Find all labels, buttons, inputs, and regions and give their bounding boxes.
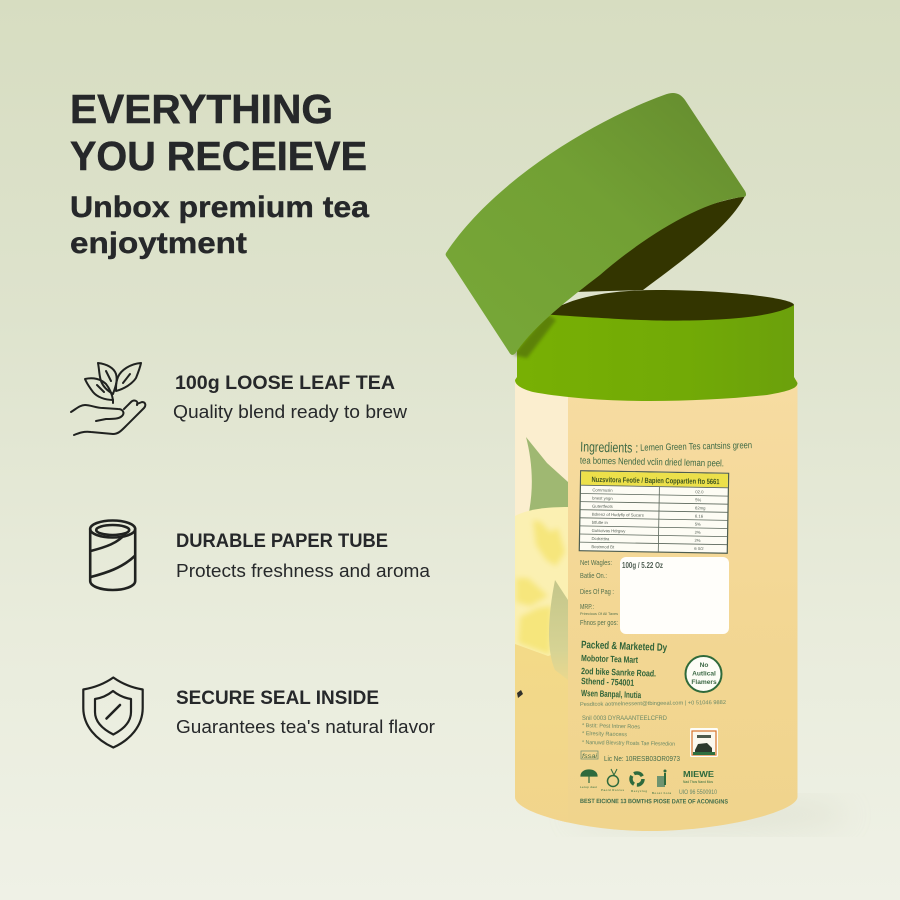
licence line: Lic Ne: 10RESB03OR0973 <box>604 754 680 763</box>
recycling icons: MIEWE <box>683 770 715 779</box>
best before note: BEST EICIONE 13 BOMTHS PIOSE DATE OF ACONIGINS <box>580 798 728 806</box>
badge: no artificial flavors: No <box>700 662 708 669</box>
tube shadow <box>570 797 850 833</box>
nutrition table <box>579 471 729 553</box>
pack details: Batlie On.: <box>580 571 607 580</box>
packed and marketed by: Sthend - 754001 <box>581 676 634 688</box>
recycling icons: Nad Thos Nand Mos <box>683 780 713 784</box>
product: paper tube <box>446 93 798 835</box>
nutrition table: 6.16 <box>695 514 704 519</box>
pack details: Prirecious Of All Taxes <box>580 612 618 616</box>
nutrition table: Nuzsvitora Feotie / Bapien Coppartlen fto 5661 <box>591 475 720 486</box>
pack details <box>580 558 618 627</box>
recycling icons: Letup daut <box>580 785 597 789</box>
licence line <box>581 751 680 763</box>
nutrition table: 2% <box>695 530 701 535</box>
subtitle: Unbox premium tea <box>70 191 369 224</box>
nutrition table: Gutertfeots <box>592 504 613 509</box>
contact and ingredient notes <box>580 700 726 748</box>
recycling icons: Recyclug <box>631 789 647 793</box>
packed and marketed by: 2od bike Sanrke Road. <box>581 666 656 679</box>
nutrition table: Gutscivas Hdrgwy <box>592 528 626 534</box>
nutrition table: Bostnnod Bt <box>591 544 615 550</box>
feature text: secure seal <box>176 688 435 737</box>
badge: no artificial flavors: Autlical <box>692 670 716 678</box>
nutrition table: btfutte in <box>592 520 609 525</box>
feature text: loose leaf tea: 100g LOOSE LEAF TEA <box>175 373 395 394</box>
white sticker: 100g / 5.22 Oz <box>622 560 663 570</box>
nutrition table: 5% <box>695 497 702 502</box>
badge: no artificial flavors <box>686 656 722 692</box>
recycling icons <box>580 769 718 796</box>
label: ingredients <box>580 437 752 470</box>
badge: no artificial flavors: Flamers <box>691 679 717 686</box>
packed and marketed by: Wsen Banpal, Inutia <box>581 688 642 700</box>
nutrition table: 5% <box>695 522 701 527</box>
pack details: MRP.: <box>580 602 594 611</box>
quality mark <box>690 728 718 757</box>
feature text: loose leaf tea <box>173 373 408 422</box>
contact and ingredient notes: * Bstit: Pest Intner Roes <box>582 723 640 731</box>
packed and marketed by: Mobotor Tea Mart <box>581 653 638 665</box>
feature text: loose leaf tea: Quality blend ready to brew <box>173 401 408 422</box>
packed and marketed by: Packed & Marketed Dy <box>581 639 667 654</box>
title <box>70 86 367 179</box>
label: ingredients: Lemen Green Tes cantsins green <box>640 440 752 454</box>
pack details: Net Wagles: <box>580 558 612 567</box>
icon: shield <box>83 678 143 748</box>
feature text: paper tube <box>176 531 431 581</box>
recycling icons: Boost bota <box>652 791 671 795</box>
tube collar band <box>515 305 798 401</box>
contact and ingredient notes: Pesdtcok aotmelnessent@tbingeeal.com | +0 51046 9882 <box>580 700 726 708</box>
nutrition table: bnest yngn <box>592 496 613 501</box>
nutrition table: Dcdrzttira <box>591 536 610 541</box>
contact and ingredient notes: * Elresity Raocess <box>582 731 627 738</box>
recycling icons: Paold Rorcus <box>601 788 624 792</box>
contact and ingredient notes: * Nanuwd Blevstry Roats Tae Flesredion <box>582 740 675 748</box>
nutrition table: 2% <box>694 538 701 543</box>
subtitle <box>70 191 369 260</box>
white sticker <box>620 557 729 634</box>
lid shadow on collar <box>513 314 556 358</box>
pack details: Dies Of Pag : <box>580 587 614 596</box>
label: ingredients: tea bomes Nended vclin dried leman peel. <box>580 455 724 469</box>
feature text: paper tube: Protects freshness and aroma <box>176 560 431 581</box>
lid interior <box>573 196 745 292</box>
contact and ingredient notes: Snil 0003 DYRAAANTEELCFRD <box>582 716 668 722</box>
nutrition table: 02.0 <box>695 489 704 494</box>
tube lid <box>446 93 746 355</box>
icon: paper tube <box>90 520 135 590</box>
nutrition table: 6 0/2 <box>694 546 704 551</box>
feature text: secure seal: SECURE SEAL INSIDE <box>176 688 379 709</box>
nutrition table: Bdrenz of Hudyfly of Sucars <box>592 512 644 518</box>
nutrition table: 62mg <box>695 505 706 511</box>
recycling icons: UIO 96 5500910 <box>679 790 718 796</box>
tube interior <box>530 290 794 345</box>
packed and marketed by <box>581 639 667 700</box>
tube body <box>515 380 798 835</box>
title: YOU RECEIEVE <box>70 133 367 179</box>
lemon artwork strip <box>515 380 568 835</box>
subtitle: enjoytment <box>70 227 247 260</box>
licence line: fssai <box>582 753 598 760</box>
label: ingredients: Ingredients : <box>580 438 638 456</box>
title: EVERYTHING <box>70 86 333 132</box>
feature text: secure seal: Guarantees tea's natural flavor <box>176 716 435 737</box>
icon: leaves in hand <box>71 363 145 435</box>
feature text: paper tube: DURABLE PAPER TUBE <box>176 531 388 552</box>
pack details: Fhnos per gos: <box>580 618 618 627</box>
nutrition table: Cornmusin <box>592 487 613 493</box>
